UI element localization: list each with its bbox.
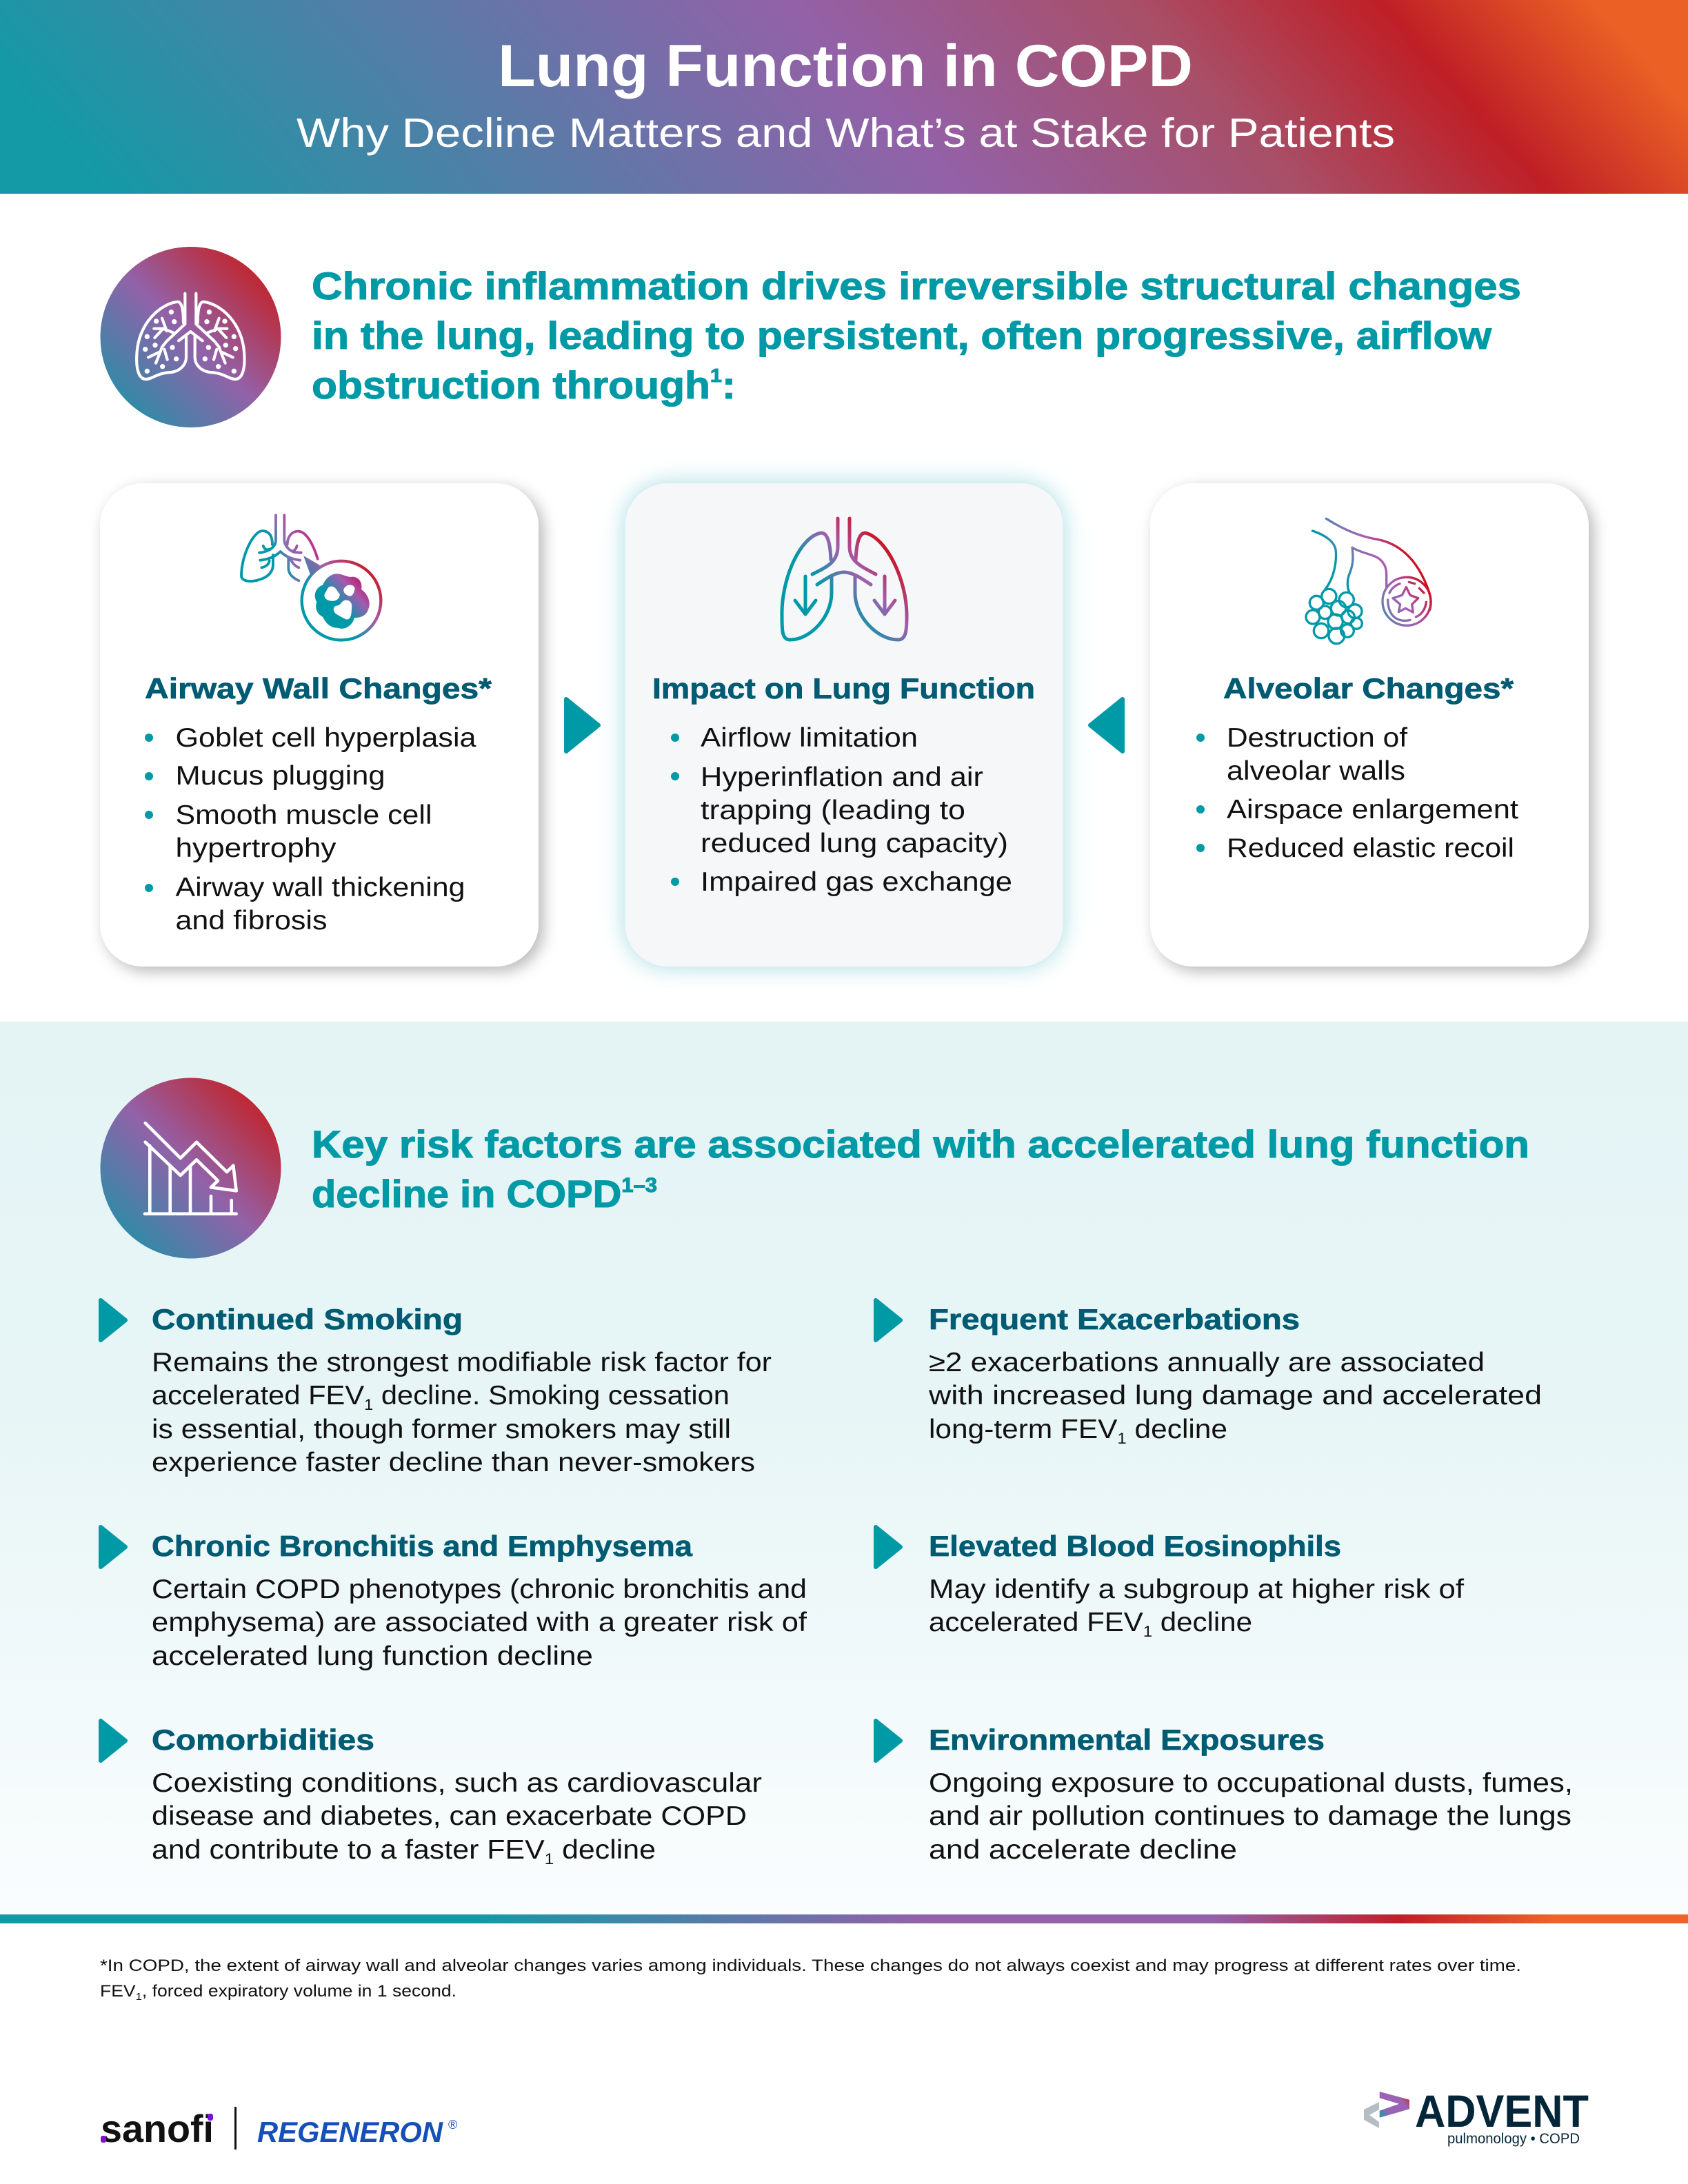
heading: chronic inflammation: : [722,363,736,407]
list: impact on lung function: Hyperinflation and air [701,762,983,792]
risk: elevated blood eosinophils: Elevated Blood Eosinophils [929,1530,1341,1562]
logo: advent [1364,2085,1589,2147]
risk: frequent exacerbations: with increased lung damage and accelerated [928,1381,1542,1410]
risk: environmental exposures: and air pollution continues to damage the lungs [929,1801,1571,1831]
risk: frequent exacerbations: Frequent Exacerbations [929,1303,1300,1335]
risk: environmental exposures: and accelerate decline [929,1835,1237,1865]
risk: frequent exacerbations [876,1300,1542,1447]
list: impact on lung function [671,723,1012,897]
list: impact on lung function: Airflow limitation [701,723,918,753]
risk: comorbidities: decline [554,1835,656,1865]
list: impact on lung function: Impaired gas exchange [701,867,1012,897]
risk: chronic bronchitis and emphysema: accelerated lung function decline [152,1641,593,1671]
card: alveolar changes [1150,483,1589,967]
risk: environmental exposures [876,1721,1573,1865]
risk: elevated blood eosinophils: decline [1152,1608,1252,1637]
risk: elevated blood eosinophils: accelerated FEV [929,1608,1127,1637]
list: alveolar changes: alveolar walls [1227,756,1405,786]
heading: chronic inflammation: Chronic inflammation drives irreversible structural changes [312,264,1521,307]
icon: alveoli [1306,518,1431,644]
logo: regeneron: REGENERON [257,2116,444,2148]
risk: continued smoking: 1 [364,1396,373,1413]
risk: comorbidities: and contribute to a faster FEV [152,1835,509,1865]
footnotes: FEV [100,1982,132,2001]
icon: declining chart in gradient circle [101,1078,281,1259]
list: airway wall changes: Mucus plugging [175,761,385,791]
risk: frequent exacerbations: 1 [1117,1430,1127,1447]
footnotes: 1 [136,1991,142,2003]
heading: chronic inflammation: 1 [710,365,722,386]
list: airway wall changes: and fibrosis [175,906,327,936]
risk: comorbidities: 1 [545,1850,554,1868]
risk: chronic bronchitis and emphysema: Certain COPD phenotypes (chronic bronchitis and [152,1575,807,1604]
risk: comorbidities: Coexisting conditions, such as cardiovascular [152,1768,762,1798]
risk: continued smoking: accelerated FEV [152,1381,350,1410]
logo: advent: pulmonology • COPD [1447,2131,1580,2147]
heading: chronic inflammation: obstruction through [312,363,681,407]
arrow: right [566,699,599,751]
list: alveolar changes: Reduced elastic recoil [1227,833,1514,863]
list: alveolar changes: Destruction of [1227,723,1407,753]
heading: chronic inflammation: in the lung, leading to persistent, often progressive, airflow [312,314,1491,357]
risk: comorbidities: Comorbidities [152,1723,374,1756]
risk: elevated blood eosinophils [876,1527,1464,1640]
risk: frequent exacerbations: long-term FEV [929,1415,1102,1444]
logo: advent: ADVENT [1415,2085,1589,2136]
heading: key risk factors: Key risk factors are associated with accelerated lung function [312,1122,1529,1166]
list: airway wall changes: Airway wall thickening [175,873,465,902]
title: Lung Function in COPD [498,33,1193,99]
icon: lungs with airway cross-section [241,515,381,640]
list: alveolar changes [1196,723,1518,863]
section: risk factors [101,1078,1573,1868]
risk: frequent exacerbations: ≥2 exacerbations annually are associated [929,1348,1485,1377]
risk: continued smoking: experience faster decline than never-smokers [152,1448,755,1477]
risk: continued smoking: is essential, though former smokers may still [152,1415,731,1444]
heading: alveolar changes: Alveolar Changes* [1223,672,1514,705]
risk: chronic bronchitis and emphysema [101,1527,807,1671]
logo: sanofi: sanofi [101,2107,214,2150]
heading: key risk factors: 1–3 [621,1174,657,1197]
section: structural changes [101,247,1521,427]
risk: chronic bronchitis and emphysema: Chronic Bronchitis and Emphysema [152,1530,693,1562]
heading: impact on lung function: Impact on Lung Function [652,672,1035,705]
list: airway wall changes: Smooth muscle cell [175,800,432,830]
arrow: left [1090,699,1123,751]
footnotes: , forced expiratory volume in 1 second. [142,1982,456,2001]
heading: airway wall changes: Airway Wall Changes* [145,672,492,705]
icon: lungs in gradient circle [101,247,281,427]
risk: continued smoking: Remains the strongest modifiable risk factor for [152,1348,772,1377]
section: risk factors background [0,1022,1688,1914]
footnotes [100,1957,1521,2003]
list: impact on lung function: trapping (leading to [701,796,965,825]
risk: comorbidities: disease and diabetes, can exacerbate COPD [152,1801,747,1831]
card: airway wall changes [100,483,539,967]
list: airway wall changes [145,723,476,936]
list: airway wall changes: hypertrophy [175,833,336,863]
risk: frequent exacerbations: decline [1127,1415,1227,1444]
subtitle: Why Decline Matters and What’s at Stake for Patients [297,110,1395,156]
icon: lungs with down arrows [782,518,907,640]
list: alveolar changes: Airspace enlargement [1227,795,1518,825]
heading: chronic inflammation [312,264,1521,407]
list: impact on lung function: reduced lung capacity) [701,829,1008,858]
header banner [0,0,1688,194]
heading: key risk factors [312,1122,1529,1215]
risk: environmental exposures: Environmental Exposures [929,1723,1325,1756]
list: airway wall changes: Goblet cell hyperplasia [175,723,476,753]
logo: regeneron: ® [448,2118,457,2132]
footnotes: *In COPD, the extent of airway wall and alveolar changes varies among individuals. These changes do not always coexist and may progress at different rates over time. [100,1957,1521,1975]
risk: continued smoking [101,1300,772,1477]
card: impact on lung function [625,483,1063,967]
risk: chronic bronchitis and emphysema: emphysema) are associated with a greater risk of [152,1608,807,1637]
risk: environmental exposures: Ongoing exposure to occupational dusts, fumes, [929,1768,1573,1798]
heading: key risk factors: decline in COPD [312,1172,612,1215]
risk: elevated blood eosinophils: 1 [1143,1623,1152,1640]
risk: elevated blood eosinophils: May identify a subgroup at higher risk of [929,1575,1464,1604]
risk: continued smoking: decline. Smoking cessation [373,1381,730,1410]
risk: comorbidities [101,1721,762,1868]
risk: continued smoking: Continued Smoking [152,1303,463,1335]
